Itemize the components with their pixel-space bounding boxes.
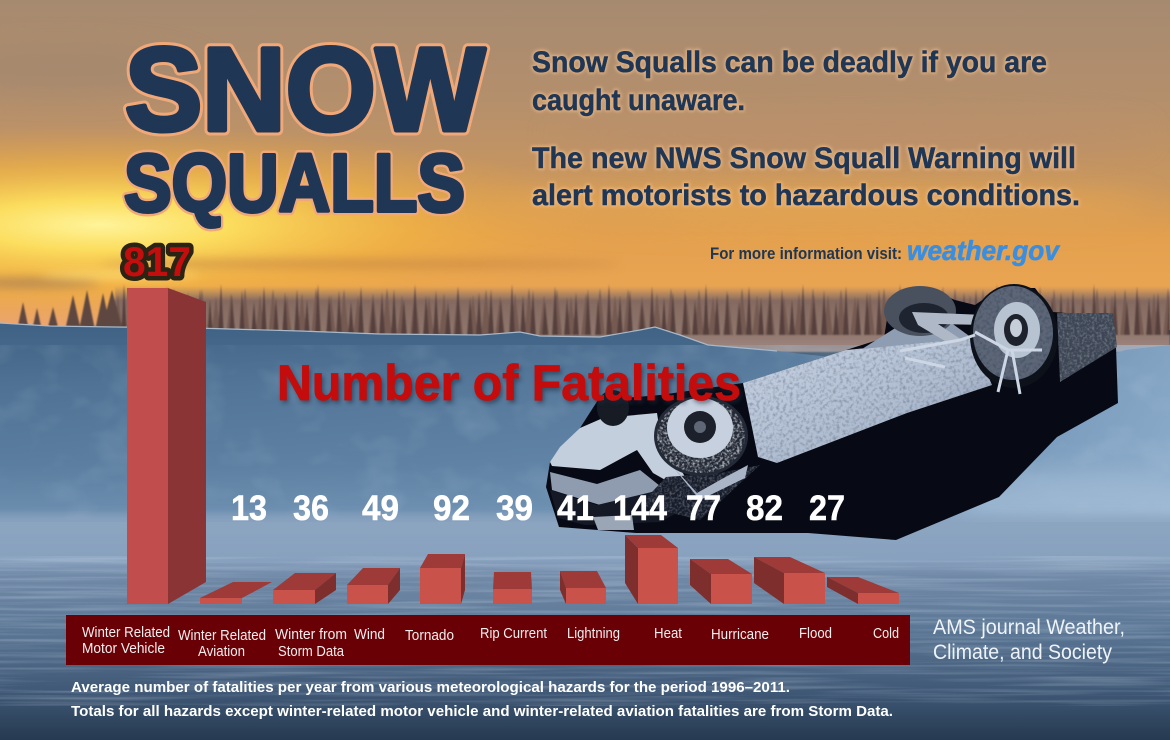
footnote: Totals for all hazards except winter-related motor vehicle and winter-related aviation fatalities are from Storm Data.: [71, 703, 893, 720]
warning message text: alert motorists to hazardous conditions.: [532, 179, 1080, 212]
title: Snow Squalls: [124, 24, 486, 229]
title line: SQUALLS: SQUALLS: [124, 138, 465, 229]
source note: AMS journal Weather,: [933, 616, 1125, 639]
value labels: 27: [809, 489, 845, 528]
value labels: 144: [613, 489, 667, 528]
far front wheel: [597, 390, 629, 426]
snowy side panel: [743, 338, 992, 463]
bar: Wind: [347, 568, 400, 604]
bar: Winter Related Aviation: [200, 582, 272, 604]
category label strip: Wind: [354, 627, 385, 643]
value labels: 77: [686, 489, 721, 528]
category label strip: Lightning: [567, 626, 620, 642]
title line: SNOW: SNOW: [125, 24, 486, 156]
source note: [933, 616, 1125, 664]
police tape: [900, 332, 1042, 394]
axle: [912, 312, 985, 347]
value labels: 36: [293, 489, 329, 528]
category label strip: Winter from: [275, 627, 347, 643]
warning message text: Snow Squalls can be deadly if you are: [532, 46, 1047, 79]
bar: Lightning: [560, 571, 606, 604]
category label strip: Flood: [799, 626, 832, 642]
value labels: 82: [746, 489, 783, 528]
bar: Tornado: [420, 554, 465, 604]
category label strip: Storm Data: [278, 644, 345, 660]
value labels: 41: [557, 489, 594, 528]
snowy hood: [550, 413, 687, 490]
value labels: 92: [433, 489, 470, 528]
frosted lower body: [640, 465, 760, 520]
warning message text: Snow Squalls can be deadly if you are: [532, 46, 1047, 79]
value labels: 13: [231, 489, 267, 528]
front wheel: [654, 396, 748, 476]
source note: Climate, and Society: [933, 641, 1112, 664]
value label: 817: 817: [123, 238, 191, 285]
far underbody snow: [862, 322, 972, 349]
category label strip: Tornado: [405, 628, 454, 644]
category label strip: [66, 615, 910, 665]
bar: Winter from Storm Data: [273, 573, 336, 604]
warning message text: The new NWS Snow Squall Warning will: [532, 142, 1076, 175]
background: icy road: [0, 516, 1170, 740]
value labels: 39: [496, 489, 533, 528]
bar: Rip Current: [493, 572, 532, 604]
wheel snow wrap: [667, 460, 748, 500]
title line: SQUALLS: SQUALLS: [124, 138, 465, 229]
footnote: Average number of fatalities per year from various meteorological hazards for the period 1996–2011.: [71, 679, 790, 696]
far rear wheel: [884, 286, 956, 336]
category label strip: Cold: [873, 626, 899, 642]
bar: Hurricane: [690, 559, 752, 604]
category label strip: Hurricane: [711, 627, 769, 643]
bar: Cold: [827, 577, 899, 604]
value label: 817: 817: [123, 238, 191, 285]
bar: Flood: [754, 557, 825, 604]
category label strip: Motor Vehicle: [82, 641, 165, 657]
category label strip: Rip Current: [480, 626, 547, 642]
warning message text: [532, 46, 1080, 212]
photo: overturned frozen car: [546, 284, 1118, 540]
background: distant forest: [16, 283, 1170, 352]
category label strip: Winter Related: [178, 628, 266, 644]
category label strip: Heat: [654, 626, 682, 642]
bar: Winter Related Motor Vehicle: [127, 288, 206, 604]
front bumper: [550, 470, 665, 505]
rear wheel: [970, 284, 1058, 388]
car silhouette: [546, 287, 1118, 540]
footnote: [71, 679, 893, 720]
warning message text: The new NWS Snow Squall Warning will: [532, 142, 1076, 175]
category label strip: Aviation: [198, 644, 245, 660]
chart heading: Number of Fatalities: Number of Fatalities: [279, 358, 743, 414]
warning message text: caught unaware.: [532, 84, 745, 117]
title line: SNOW: SNOW: [125, 24, 486, 156]
more information link text: weather.gov: [907, 235, 1060, 266]
bumper highlight: [593, 515, 634, 530]
more information link text: For more information visit:: [710, 244, 902, 263]
background: snow bank: [0, 323, 1170, 540]
bar: Heat: [625, 535, 678, 604]
value labels: 49: [362, 489, 399, 528]
warning message text: alert motorists to hazardous conditions.: [532, 179, 1080, 212]
chart heading: Number of Fatalities: Number of Fatalities: [277, 355, 741, 411]
3D bar chart: [127, 288, 899, 604]
more information link text: [710, 235, 1060, 266]
warning message text: caught unaware.: [532, 84, 745, 117]
category label strip: Winter Related: [82, 625, 170, 641]
value labels: [231, 489, 845, 528]
background: sunset sky: [0, 0, 1170, 330]
rear quarter: [1057, 313, 1117, 382]
